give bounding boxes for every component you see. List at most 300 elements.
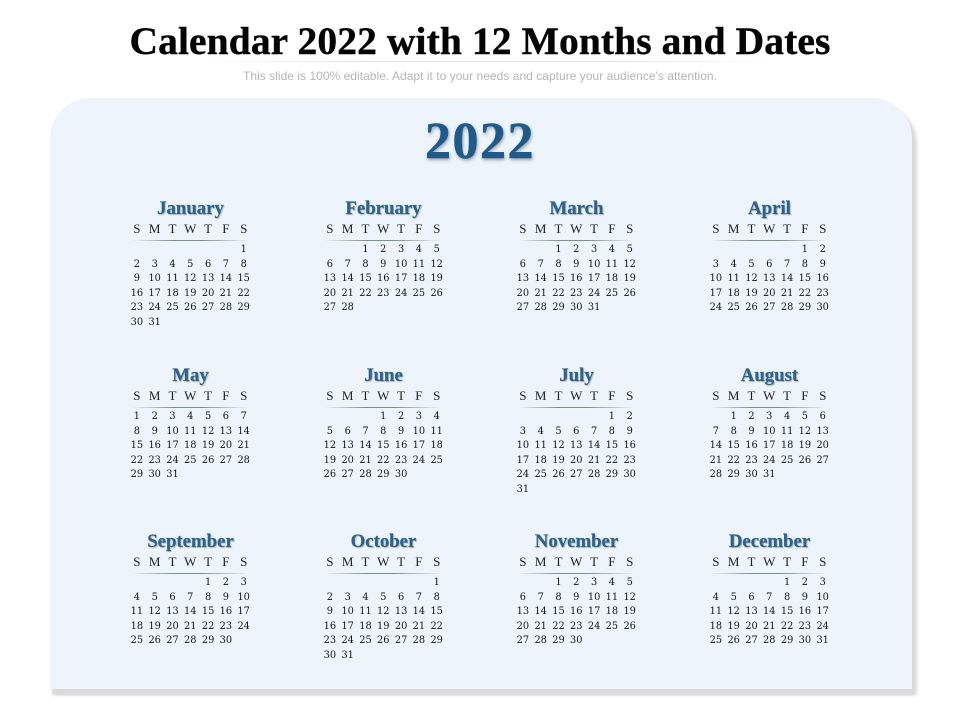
dates: 2 xyxy=(380,244,386,255)
weekday header: W xyxy=(763,221,775,236)
dates: 30 xyxy=(131,317,143,328)
dates: 23 xyxy=(745,455,758,466)
dates: 7 xyxy=(223,259,229,270)
dates: 5 xyxy=(802,411,808,422)
dates: 30 xyxy=(148,469,161,480)
dates: 2 xyxy=(134,259,140,270)
dates: 25 xyxy=(131,635,143,646)
dates: 4 xyxy=(784,411,790,422)
dates: 20 xyxy=(202,288,214,299)
dates: 15 xyxy=(430,606,443,617)
dates: 11 xyxy=(727,273,740,284)
dates: 26 xyxy=(202,455,214,466)
dates: 13 xyxy=(816,426,829,437)
dates: 1 xyxy=(362,244,369,255)
dates: 27 xyxy=(395,635,407,646)
dates: 21 xyxy=(220,288,232,299)
weekday header: S xyxy=(133,221,141,236)
dates: 10 xyxy=(763,426,776,437)
dates: 15 xyxy=(799,273,811,284)
weekday header: T xyxy=(783,221,791,236)
dates: 9 xyxy=(327,606,333,617)
dates: 17 xyxy=(710,288,722,299)
weekday header: T xyxy=(169,388,176,403)
dates: 30 xyxy=(220,635,232,646)
weekday header: W xyxy=(570,388,582,403)
weekday header xyxy=(133,388,247,403)
dates: 17 xyxy=(413,440,425,451)
dates: 24 xyxy=(763,455,776,466)
dates: 28 xyxy=(184,635,197,646)
dates: 7 xyxy=(241,411,247,422)
dates: 12 xyxy=(324,440,336,451)
dates: 3 xyxy=(591,244,597,255)
dates: 20 xyxy=(220,440,232,451)
weekday header xyxy=(326,554,440,569)
weekday header: W xyxy=(570,221,582,236)
month: March xyxy=(517,198,636,313)
dates: 25 xyxy=(606,621,618,632)
dates: 1 xyxy=(380,411,386,422)
dates: 30 xyxy=(799,635,811,646)
dates: 6 xyxy=(345,426,351,437)
weekday header: M xyxy=(342,554,353,569)
month: January xyxy=(131,198,250,328)
dates: 5 xyxy=(748,259,755,270)
dates: 20 xyxy=(341,455,354,466)
dates: 14 xyxy=(534,606,547,617)
dates: 18 xyxy=(606,273,618,284)
weekday header: T xyxy=(397,554,405,569)
dates: 24 xyxy=(395,288,407,299)
dates: 3 xyxy=(416,411,422,422)
dates: 18 xyxy=(710,621,722,632)
dates: 20 xyxy=(745,621,758,632)
dates: 8 xyxy=(802,259,808,270)
dates xyxy=(710,411,829,480)
weekday header: W xyxy=(184,388,196,403)
dates: 11 xyxy=(430,426,443,437)
dates: 15 xyxy=(131,440,143,451)
dates: 29 xyxy=(131,469,143,480)
dates: 30 xyxy=(570,302,583,313)
weekday header: S xyxy=(519,388,527,403)
dates xyxy=(517,577,636,646)
dates: 4 xyxy=(187,411,193,422)
weekday header: T xyxy=(362,221,369,236)
dates: 3 xyxy=(169,411,176,422)
dates: 18 xyxy=(727,288,740,299)
dates: 25 xyxy=(606,288,618,299)
weekday header: S xyxy=(326,388,334,403)
month name: July xyxy=(559,365,594,386)
weekday header: M xyxy=(149,554,160,569)
dates: 10 xyxy=(710,273,722,284)
dates: 10 xyxy=(588,259,600,270)
dates: 19 xyxy=(324,455,336,466)
dates: 21 xyxy=(781,288,793,299)
dates: 18 xyxy=(430,440,443,451)
dates: 22 xyxy=(781,621,793,632)
dates: 17 xyxy=(588,273,600,284)
dates: 9 xyxy=(152,426,158,437)
dates: 27 xyxy=(220,455,232,466)
weekday header: S xyxy=(626,388,633,403)
weekday header xyxy=(712,221,826,236)
dates: 26 xyxy=(148,635,161,646)
dates: 15 xyxy=(552,606,565,617)
month: May xyxy=(131,365,250,480)
dates: 16 xyxy=(395,440,407,451)
dates: 1 xyxy=(241,244,247,255)
dates: 11 xyxy=(184,426,197,437)
dates: 11 xyxy=(710,606,722,617)
dates: 25 xyxy=(184,455,197,466)
dates: 16 xyxy=(816,273,829,284)
dates: 8 xyxy=(555,592,562,603)
dates: 13 xyxy=(324,273,336,284)
dates: 3 xyxy=(520,426,526,437)
month name: December xyxy=(729,531,810,552)
dates: 17 xyxy=(166,440,179,451)
dates: 3 xyxy=(152,259,158,270)
dates: 5 xyxy=(152,592,158,603)
dates: 4 xyxy=(731,259,737,270)
weekday header xyxy=(326,388,440,403)
dates: 29 xyxy=(727,469,740,480)
dates xyxy=(517,411,636,495)
dates: 12 xyxy=(623,259,636,270)
dates: 20 xyxy=(816,440,829,451)
dates: 4 xyxy=(609,244,615,255)
dates: 31 xyxy=(517,484,529,495)
weekday header: F xyxy=(608,221,616,236)
dates: 22 xyxy=(237,288,250,299)
dates: 22 xyxy=(799,288,811,299)
weekday header: W xyxy=(377,388,389,403)
dates: 11 xyxy=(534,440,547,451)
dates: 28 xyxy=(237,455,250,466)
dates: 6 xyxy=(748,592,755,603)
dates: 28 xyxy=(588,469,600,480)
dates: 13 xyxy=(166,606,179,617)
dates: 4 xyxy=(609,577,615,588)
dates: 1 xyxy=(731,411,737,422)
dates: 18 xyxy=(359,621,372,632)
dates xyxy=(324,577,443,661)
dates: 4 xyxy=(434,411,440,422)
dates: 24 xyxy=(148,302,161,313)
month name: September xyxy=(147,531,234,552)
weekday header: T xyxy=(590,554,598,569)
dates: 17 xyxy=(763,440,776,451)
dates: 2 xyxy=(748,411,755,422)
dates: 10 xyxy=(395,259,407,270)
dates: 14 xyxy=(710,440,722,451)
dates: 26 xyxy=(623,288,636,299)
dates: 26 xyxy=(745,302,758,313)
month name: April xyxy=(748,198,791,219)
dates: 28 xyxy=(534,635,547,646)
dates: 9 xyxy=(748,426,755,437)
dates: 23 xyxy=(324,635,336,646)
dates: 12 xyxy=(202,426,214,437)
dates: 7 xyxy=(766,592,772,603)
dates: 22 xyxy=(727,455,740,466)
dates: 6 xyxy=(398,592,404,603)
dates: 19 xyxy=(184,288,197,299)
dates: 3 xyxy=(713,259,719,270)
dates: 11 xyxy=(359,606,372,617)
dates: 11 xyxy=(131,606,143,617)
dates: 22 xyxy=(131,455,143,466)
weekday header: M xyxy=(535,388,546,403)
dates: 16 xyxy=(131,288,143,299)
weekday header: F xyxy=(608,388,616,403)
dates: 23 xyxy=(220,621,232,632)
weekday header xyxy=(712,388,826,403)
dates: 26 xyxy=(184,302,197,313)
dates: 14 xyxy=(220,273,232,284)
dates: 22 xyxy=(359,288,372,299)
dates: 18 xyxy=(413,273,425,284)
dates: 21 xyxy=(534,621,547,632)
weekday header xyxy=(326,221,440,236)
dates: 13 xyxy=(395,606,407,617)
weekday header: F xyxy=(415,554,422,569)
dates: 8 xyxy=(434,592,440,603)
month: September xyxy=(131,531,250,646)
dates: 26 xyxy=(552,469,565,480)
dates: 11 xyxy=(413,259,425,270)
month name: June xyxy=(364,365,403,386)
dates: 16 xyxy=(324,621,336,632)
dates: 24 xyxy=(341,635,354,646)
weekday header: S xyxy=(240,388,247,403)
dates: 3 xyxy=(820,577,826,588)
dates: 8 xyxy=(609,426,615,437)
dates: 25 xyxy=(359,635,372,646)
weekday header: S xyxy=(433,388,440,403)
weekday header: T xyxy=(555,221,562,236)
weekday header xyxy=(133,221,247,236)
dates: 27 xyxy=(570,469,583,480)
dates: 27 xyxy=(745,635,758,646)
dates: 10 xyxy=(816,592,829,603)
dates: 7 xyxy=(591,426,597,437)
dates: 7 xyxy=(538,592,544,603)
weekday header: F xyxy=(415,221,422,236)
weekday header xyxy=(519,554,633,569)
dates: 22 xyxy=(606,455,618,466)
dates: 12 xyxy=(727,606,740,617)
dates: 19 xyxy=(623,606,636,617)
dates: 5 xyxy=(380,592,386,603)
dates: 13 xyxy=(763,273,776,284)
dates: 15 xyxy=(359,273,372,284)
dates: 12 xyxy=(148,606,161,617)
month: November xyxy=(517,531,636,646)
dates: 21 xyxy=(184,621,197,632)
dates: 6 xyxy=(327,259,333,270)
month name: August xyxy=(741,365,798,386)
dates: 9 xyxy=(573,259,579,270)
dates: 16 xyxy=(570,606,583,617)
weekday header: T xyxy=(362,388,369,403)
dates: 22 xyxy=(552,621,565,632)
dates: 20 xyxy=(324,288,336,299)
weekday header: T xyxy=(204,221,212,236)
dates: 29 xyxy=(799,302,811,313)
dates: 2 xyxy=(627,411,633,422)
dates: 25 xyxy=(710,635,722,646)
dates: 24 xyxy=(588,288,600,299)
subtitle: This slide is 100% editable. Adapt it to your needs and capture your audience's attention. xyxy=(243,69,717,83)
dates: 23 xyxy=(148,455,161,466)
dates: 28 xyxy=(534,302,547,313)
dates: 15 xyxy=(202,606,214,617)
weekday header: T xyxy=(748,388,755,403)
dates: 17 xyxy=(517,455,529,466)
weekday header: W xyxy=(570,554,582,569)
dates: 8 xyxy=(205,592,211,603)
weekday header: T xyxy=(169,554,176,569)
weekday header xyxy=(519,388,633,403)
weekday header: S xyxy=(433,221,440,236)
year heading: 2022 xyxy=(425,113,535,170)
dates: 6 xyxy=(169,592,176,603)
dates: 8 xyxy=(362,259,369,270)
dates: 26 xyxy=(430,288,443,299)
dates: 10 xyxy=(166,426,179,437)
dates: 10 xyxy=(517,440,529,451)
dates: 21 xyxy=(237,440,250,451)
dates: 8 xyxy=(731,426,737,437)
dates: 16 xyxy=(623,440,636,451)
dates: 7 xyxy=(187,592,193,603)
month: June xyxy=(324,365,443,480)
weekday header: W xyxy=(184,554,196,569)
month name: May xyxy=(172,365,209,386)
weekday header: T xyxy=(169,221,176,236)
weekday header: T xyxy=(748,554,755,569)
dates: 2 xyxy=(327,592,333,603)
dates: 14 xyxy=(588,440,600,451)
title: Calendar 2022 with 12 Months and Dates xyxy=(130,19,830,63)
dates: 16 xyxy=(220,606,232,617)
dates: 8 xyxy=(784,592,790,603)
dates: 26 xyxy=(623,621,636,632)
dates: 19 xyxy=(623,273,636,284)
dates: 8 xyxy=(555,259,562,270)
month name: October xyxy=(351,531,416,552)
dates: 28 xyxy=(341,302,354,313)
dates: 2 xyxy=(820,244,826,255)
weekday header: S xyxy=(712,221,720,236)
weekday header: S xyxy=(626,221,633,236)
dates: 28 xyxy=(220,302,232,313)
dates: 20 xyxy=(763,288,776,299)
dates: 18 xyxy=(131,621,143,632)
dates: 21 xyxy=(534,288,547,299)
weekday header: S xyxy=(712,554,720,569)
dates: 15 xyxy=(606,440,618,451)
weekday header: S xyxy=(626,554,633,569)
dates: 30 xyxy=(745,469,758,480)
dates: 12 xyxy=(430,259,443,270)
dates: 23 xyxy=(623,455,636,466)
dates: 26 xyxy=(727,635,740,646)
dates xyxy=(131,577,250,646)
dates: 25 xyxy=(534,469,547,480)
dates: 23 xyxy=(816,288,829,299)
dates: 5 xyxy=(627,244,633,255)
dates: 24 xyxy=(517,469,529,480)
dates: 8 xyxy=(241,259,247,270)
dates: 29 xyxy=(430,635,443,646)
weekday header: T xyxy=(397,221,405,236)
weekday header: F xyxy=(222,554,230,569)
dates: 29 xyxy=(606,469,618,480)
weekday header: S xyxy=(240,554,247,569)
dates: 27 xyxy=(166,635,179,646)
weekday header: S xyxy=(712,388,720,403)
dates: 13 xyxy=(517,273,529,284)
dates: 12 xyxy=(745,273,758,284)
dates: 3 xyxy=(241,577,247,588)
weekday header: M xyxy=(728,388,739,403)
dates: 9 xyxy=(223,592,229,603)
weekday header: S xyxy=(326,554,334,569)
dates: 1 xyxy=(134,411,140,422)
dates: 25 xyxy=(413,288,425,299)
dates: 9 xyxy=(573,592,579,603)
weekday header: F xyxy=(415,388,422,403)
dates: 30 xyxy=(570,635,583,646)
dates: 28 xyxy=(763,635,776,646)
dates: 16 xyxy=(799,606,811,617)
dates: 9 xyxy=(627,426,633,437)
dates: 2 xyxy=(223,577,229,588)
dates: 31 xyxy=(763,469,776,480)
month name: February xyxy=(345,198,422,219)
dates: 10 xyxy=(237,592,250,603)
dates: 22 xyxy=(430,621,443,632)
weekday header: F xyxy=(801,554,808,569)
dates: 8 xyxy=(134,426,140,437)
weekday header: T xyxy=(397,388,405,403)
dates: 19 xyxy=(745,288,758,299)
dates: 17 xyxy=(588,606,600,617)
dates: 11 xyxy=(606,592,618,603)
dates: 29 xyxy=(377,469,390,480)
dates: 2 xyxy=(573,244,579,255)
weekday header: T xyxy=(555,554,562,569)
dates: 1 xyxy=(784,577,790,588)
month name: March xyxy=(550,198,603,219)
dates: 7 xyxy=(345,259,351,270)
dates: 4 xyxy=(416,244,422,255)
dates: 2 xyxy=(573,577,579,588)
dates: 16 xyxy=(148,440,161,451)
dates: 14 xyxy=(359,440,372,451)
month name: January xyxy=(157,198,224,219)
dates: 22 xyxy=(202,621,214,632)
dates: 19 xyxy=(202,440,214,451)
dates: 5 xyxy=(187,259,193,270)
dates: 20 xyxy=(395,621,407,632)
weekday header xyxy=(519,221,633,236)
